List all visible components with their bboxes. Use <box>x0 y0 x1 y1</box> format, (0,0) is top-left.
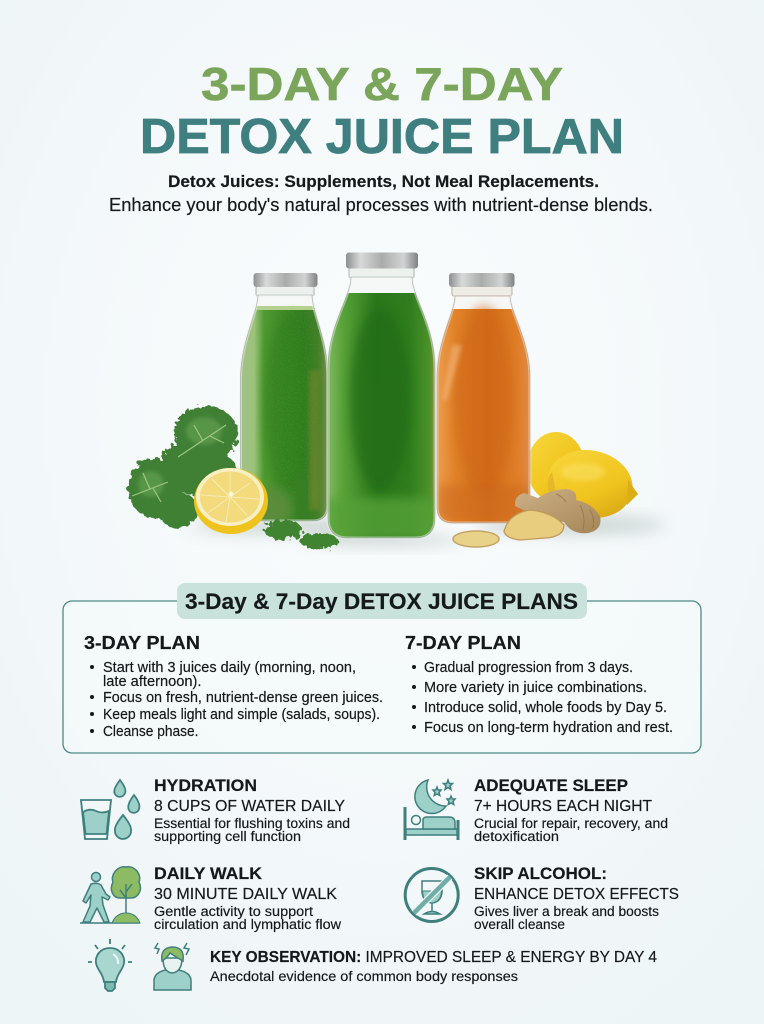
3-day plan column <box>84 633 383 740</box>
panel heading: 3-Day & 7-Day DETOX JUICE PLANS <box>185 589 578 614</box>
title: DETOX JUICE PLAN <box>140 110 624 164</box>
panel heading <box>177 583 587 619</box>
text: skip alcohol: Gives liver a break and boosts <box>474 904 659 919</box>
3-day plan column: Start with 3 juices daily (morning, noon, <box>103 660 356 676</box>
bottle: right orange juice <box>435 273 532 526</box>
text: hydration <box>154 777 350 844</box>
7-day plan column: Introduce solid, whole foods by Day 5. <box>424 700 667 716</box>
text: hydration: supporting cell function <box>154 829 301 844</box>
title <box>140 58 624 164</box>
text: skip alcohol: ENHANCE DETOX EFFECTS <box>474 886 679 903</box>
panel: detox juice plans <box>63 583 701 753</box>
icon: no alcohol <box>405 868 458 922</box>
text: adequate sleep: 7+ HOURS EACH NIGHT <box>474 798 653 815</box>
icon: moon, stars and bed <box>405 780 458 840</box>
7-day plan column: 7-DAY PLAN <box>405 633 521 653</box>
key observation: KEY OBSERVATION: IMPROVED SLEEP & ENERGY BY DAY 4 <box>210 949 657 966</box>
text: daily walk: circulation and lymphatic flow <box>154 917 341 932</box>
3-day plan column: 3-DAY PLAN <box>84 633 200 653</box>
7-day plan column: Focus on long-term hydration and rest. <box>424 720 673 736</box>
3-day plan column: Cleanse phase. <box>103 724 198 740</box>
text: adequate sleep <box>474 777 668 844</box>
subtitle: Enhance your body's natural processes with nutrient-dense blends. <box>109 194 653 215</box>
text: hydration: Essential for flushing toxins and <box>154 816 350 831</box>
halved lemon <box>194 468 268 534</box>
3-day plan column: Keep meals light and simple (salads, soups). <box>103 707 380 723</box>
icon: walker and tree <box>80 867 140 923</box>
icon: person with energy bolts <box>154 943 191 990</box>
title: 3-DAY & 7-DAY <box>201 58 563 110</box>
key observation <box>210 949 657 984</box>
bottle: centre green juice <box>326 252 437 540</box>
7-day plan column: More variety in juice combinations. <box>424 680 647 696</box>
small kale sprigs <box>264 520 338 549</box>
subtitle: Detox Juices: Supplements, Not Meal Replacements. <box>168 172 599 191</box>
text: adequate sleep: ADEQUATE SLEEP <box>474 777 628 795</box>
text: skip alcohol <box>474 865 679 932</box>
7-day plan column: Gradual progression from 3 days. <box>424 660 633 676</box>
3-day plan column: late afternoon). <box>103 674 202 690</box>
whole lemon: back <box>527 432 585 502</box>
ginger slice <box>453 531 499 547</box>
text: adequate sleep: detoxification <box>474 829 559 844</box>
text: adequate sleep: Crucial for repair, recovery, and <box>474 816 668 831</box>
text: daily walk: 30 MINUTE DAILY WALK <box>154 886 338 903</box>
text: daily walk <box>154 865 341 932</box>
photo: juice bottles with kale, lemon and ginger <box>128 252 665 549</box>
ginger root <box>504 489 600 540</box>
icon: water glass and drops <box>81 780 139 839</box>
ground shadow <box>190 516 665 546</box>
text: daily walk: DAILY WALK <box>154 865 262 883</box>
text: daily walk: Gentle activity to support <box>154 904 313 919</box>
subtitle <box>109 172 653 215</box>
7-day plan column <box>405 633 673 736</box>
bottle: left green smoothie <box>238 273 330 528</box>
text: hydration: 8 CUPS OF WATER DAILY <box>154 798 345 815</box>
kale leaves <box>128 406 238 528</box>
panel border <box>63 601 701 753</box>
key observation: Anecdotal evidence of common body responses <box>210 968 518 984</box>
text: skip alcohol: overall cleanse <box>474 917 565 932</box>
text: skip alcohol: SKIP ALCOHOL: <box>474 865 607 883</box>
whole lemon: front <box>541 442 639 526</box>
text: hydration: HYDRATION <box>154 777 257 795</box>
icon: light bulb <box>88 939 132 991</box>
3-day plan column: Focus on fresh, nutrient-dense green juices. <box>103 690 383 706</box>
